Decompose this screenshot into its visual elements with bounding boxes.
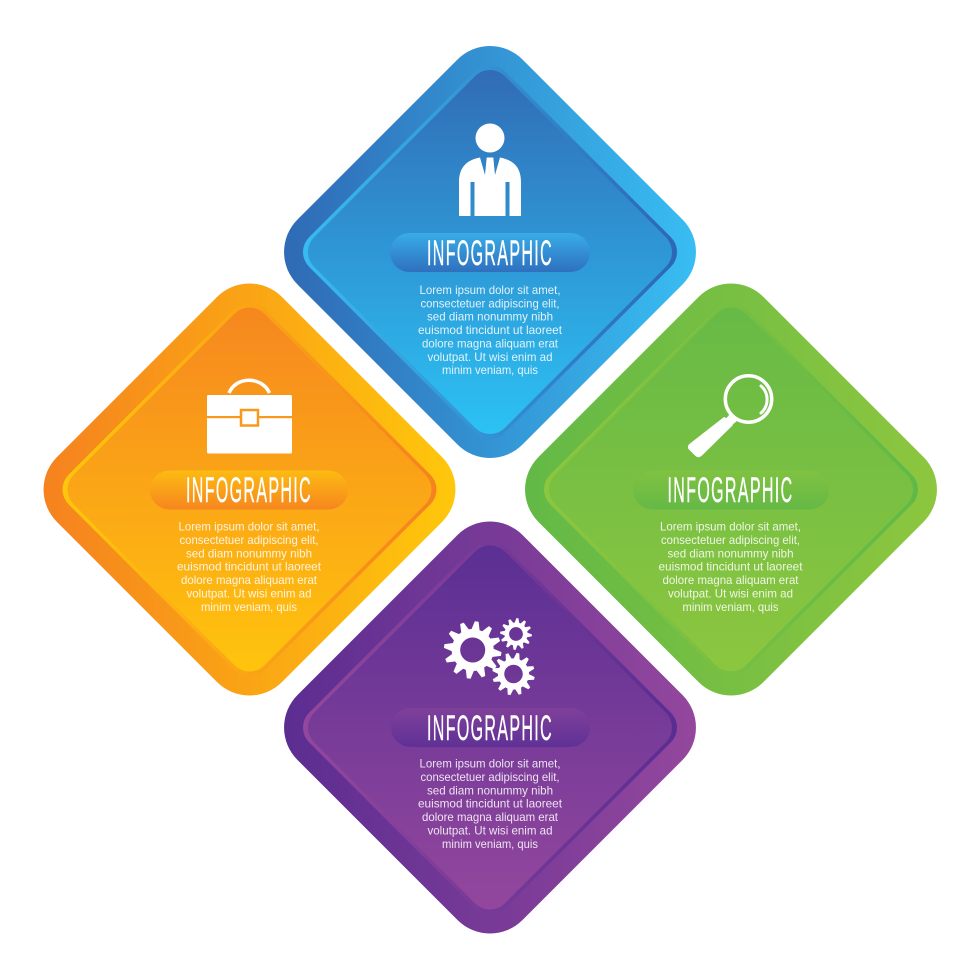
body text: Lorem ipsum dolor sit amet, bbox=[178, 520, 320, 534]
body text: consectetuer adipiscing elit, bbox=[180, 533, 318, 547]
body text: minim veniam, quis bbox=[442, 363, 538, 377]
body text bbox=[418, 283, 563, 377]
green diamond shape bbox=[525, 284, 937, 695]
body text: minim veniam, quis bbox=[682, 600, 778, 614]
body text: Lorem ipsum dolor sit amet, bbox=[660, 520, 801, 534]
icon: briefcase bbox=[207, 380, 292, 454]
heading pill: INFOGRAPHIC bbox=[668, 471, 794, 510]
heading pill bbox=[390, 233, 590, 273]
body text: minim veniam, quis bbox=[201, 600, 297, 614]
blue diamond shape bbox=[284, 46, 696, 458]
panel: orange diamond bbox=[44, 284, 455, 695]
body text bbox=[418, 757, 563, 851]
heading pill bbox=[633, 470, 829, 510]
orange diamond shape bbox=[44, 284, 455, 695]
body text: minim veniam, quis bbox=[442, 837, 538, 851]
panel: green diamond bbox=[525, 284, 937, 695]
body text: volutpat. Ut wisi enim ad bbox=[668, 586, 793, 600]
body text: euismod tincidunt ut laoreet bbox=[418, 323, 563, 337]
body text: sed diam nonummy nibh bbox=[186, 546, 312, 560]
body text: Lorem ipsum dolor sit amet, bbox=[420, 283, 560, 297]
heading pill: INFOGRAPHIC bbox=[427, 234, 553, 273]
body text: volutpat. Ut wisi enim ad bbox=[428, 350, 552, 364]
body text: volutpat. Ut wisi enim ad bbox=[186, 586, 312, 600]
body text: consectetuer adipiscing elit, bbox=[420, 770, 560, 784]
heading pill bbox=[391, 708, 590, 748]
icon: magnifying glass bbox=[688, 376, 772, 457]
body text: dolore magna aliquam erat bbox=[181, 573, 318, 587]
icon: businessman bbox=[459, 124, 521, 216]
body text: dolore magna aliquam erat bbox=[662, 573, 799, 587]
body text: euismod tincidunt ut laoreet bbox=[658, 560, 803, 574]
icon: gears bbox=[440, 617, 539, 699]
body text: dolore magna aliquam erat bbox=[422, 336, 559, 350]
body text bbox=[658, 520, 803, 614]
body text: euismod tincidunt ut laoreet bbox=[418, 797, 563, 811]
panel: purple diamond bbox=[284, 522, 696, 933]
body text: volutpat. Ut wisi enim ad bbox=[428, 823, 552, 837]
body text: consectetuer adipiscing elit, bbox=[661, 533, 800, 547]
body text: euismod tincidunt ut laoreet bbox=[177, 560, 322, 574]
body text: Lorem ipsum dolor sit amet, bbox=[420, 757, 560, 771]
body text: sed diam nonummy nibh bbox=[427, 783, 553, 797]
body text: consectetuer adipiscing elit, bbox=[420, 296, 560, 310]
body text: sed diam nonummy nibh bbox=[427, 310, 553, 324]
body text: sed diam nonummy nibh bbox=[668, 546, 794, 560]
body text: dolore magna aliquam erat bbox=[422, 810, 559, 824]
heading pill: INFOGRAPHIC bbox=[186, 471, 312, 510]
panel: blue diamond bbox=[284, 46, 696, 458]
heading pill: INFOGRAPHIC bbox=[427, 709, 553, 748]
body text bbox=[177, 520, 322, 614]
purple diamond shape bbox=[284, 522, 696, 933]
heading pill bbox=[150, 470, 348, 510]
